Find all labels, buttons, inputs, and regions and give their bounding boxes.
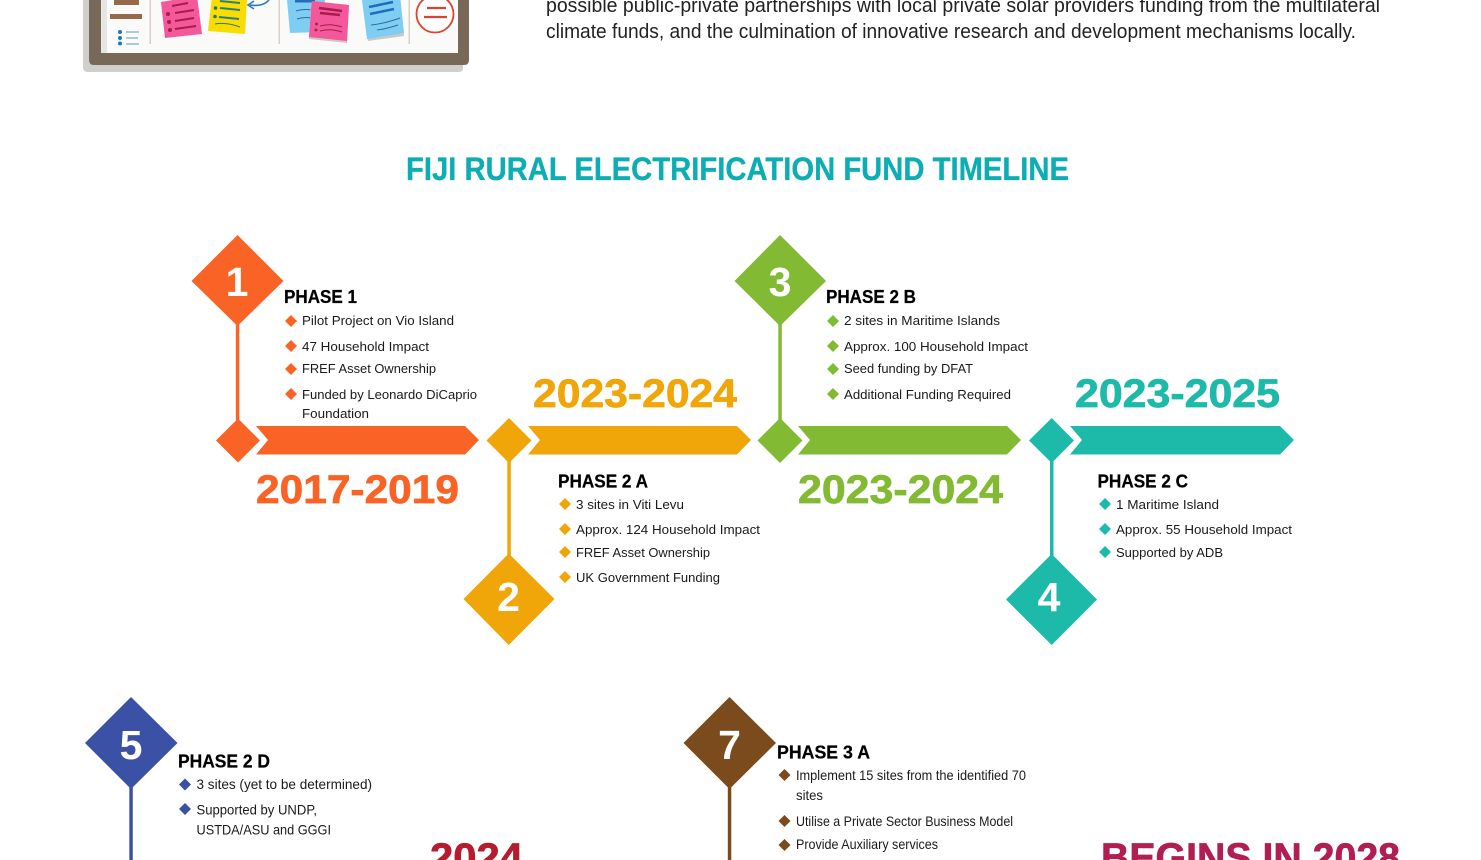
phase 2 D milestone: blue: USTDA/ASU and GGGI — [196, 822, 331, 838]
phase 2 D milestone: blue: 3 sites (yet to be determined) — [196, 776, 372, 792]
phase 3 A milestone: brown: PHASE 3 A — [777, 742, 870, 762]
phase 2 A milestone: amber: 2 — [497, 574, 520, 620]
phase 1 milestone: orange: Pilot Project on Vio Island — [302, 313, 454, 328]
phase 2 D milestone: blue — [85, 697, 372, 860]
phase 3 A milestone: brown: Provide Auxiliary services — [796, 836, 938, 852]
phase 2 C milestone: teal: PHASE 2 C — [1098, 472, 1188, 492]
phase 3 A milestone: brown: 7 — [718, 722, 741, 768]
phase 2 B milestone: green: 2 sites in Maritime Islands — [844, 313, 1001, 328]
intro text block — [546, 0, 1380, 43]
phase 2 B milestone: green: 2023-2024 — [798, 468, 1004, 512]
phase 1 milestone: orange: 47 Household Impact — [302, 339, 429, 354]
phase 2 A milestone: amber: UK Government Funding — [576, 570, 720, 585]
phase 2 B milestone: green: Seed funding by DFAT — [844, 361, 973, 376]
phase 2 A milestone: amber: Approx. 124 Household Impact — [576, 522, 760, 537]
intro text block: climate funds, and the culmination of innovative research and development mechanisms locally. — [546, 21, 1356, 43]
phase 2 B milestone: green: Approx. 100 Household Impact — [844, 339, 1028, 354]
phase 2 C milestone: teal: Approx. 55 Household Impact — [1116, 522, 1292, 537]
phase 1 milestone: orange: Funded by Leonardo DiCaprio — [302, 387, 477, 402]
illustration: planning board with sticky notes — [83, 0, 469, 72]
phase 3 A milestone: brown: sites — [796, 787, 823, 803]
phase 2 A milestone: amber: PHASE 2 A — [558, 472, 648, 492]
phase 2 B milestone: green: Additional Funding Required — [844, 387, 1011, 402]
phase 1 milestone: orange: Foundation — [302, 406, 369, 421]
phase 2 C milestone: teal: 2023-2025 — [1075, 372, 1280, 416]
phase 2 B milestone: green: PHASE 2 B — [826, 287, 916, 307]
phase 2 D milestone: blue: 5 — [120, 722, 142, 768]
phase 2 B milestone: green — [734, 235, 1028, 512]
phase 2 C milestone: teal: 1 Maritime Island — [1116, 497, 1219, 512]
phase 2 B milestone: green: 3 — [769, 259, 791, 305]
phase 2 A milestone: amber: 2023-2024 — [533, 372, 738, 416]
phase 1 milestone: orange: 1 — [226, 259, 248, 305]
phase 1 milestone: orange — [192, 235, 479, 512]
phase 3 A milestone: brown — [684, 697, 1026, 860]
title: FIJI RURAL ELECTRIFICATION FUND TIMELINE — [406, 151, 1069, 187]
phase 2 C milestone: teal — [1006, 372, 1294, 645]
phase 2 A milestone: amber: 3 sites in Viti Levu — [576, 497, 684, 512]
phase 1 milestone: orange: 2017-2019 — [256, 468, 459, 512]
phase 2 D milestone: blue: Supported by UNDP, — [196, 802, 317, 818]
phase 1 milestone: orange: PHASE 1 — [284, 287, 357, 307]
phase 3 A milestone: brown: Utilise a Private Sector Business Model — [796, 813, 1013, 829]
phase 2 A milestone: amber: FREF Asset Ownership — [576, 545, 710, 560]
phase 2 C milestone: teal: 4 — [1038, 574, 1061, 620]
phase 2 A milestone: amber — [464, 372, 760, 645]
phase 1 milestone: orange: FREF Asset Ownership — [302, 361, 436, 376]
phase 2 D milestone: blue: PHASE 2 D — [178, 752, 270, 772]
phase 3 A milestone: brown: Implement 15 sites from the identified 70 — [796, 767, 1026, 783]
phase 2 C milestone: teal: Supported by ADB — [1116, 545, 1223, 560]
